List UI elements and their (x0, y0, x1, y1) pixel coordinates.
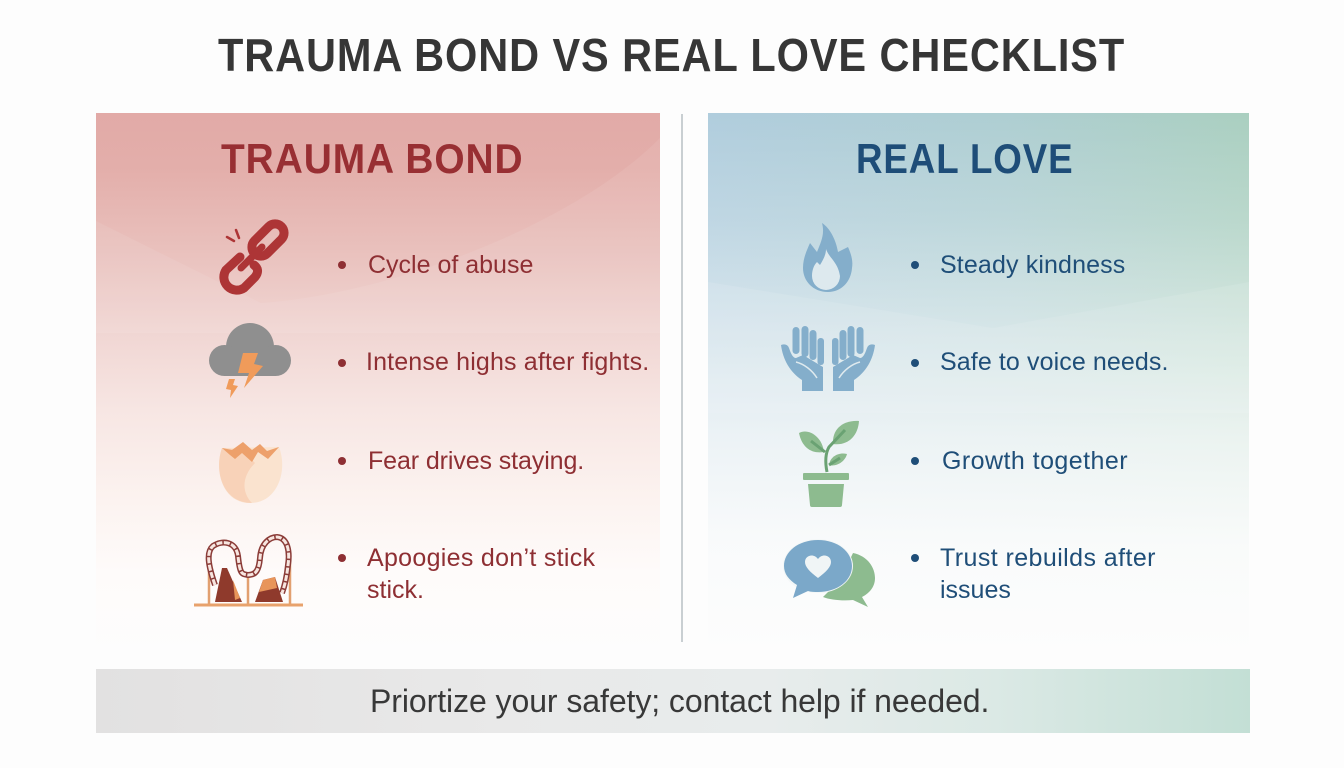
icon: broken chain (224, 220, 288, 290)
item: safe to voice needs: Safe to voice needs. (940, 348, 1169, 376)
center divider (681, 114, 683, 642)
panel: trauma bond (96, 113, 660, 653)
icon: flame (803, 223, 852, 292)
heading: trauma bond: TRAUMA BOND (221, 135, 524, 182)
footer text: Priortize your safety; contact help if needed. (370, 683, 989, 719)
icon: storm cloud (209, 323, 291, 398)
footer banner (96, 669, 1250, 733)
item: apologies (338, 544, 595, 604)
panel: real love (708, 113, 1249, 653)
item: apologies: Apoogies don’t stick (367, 544, 595, 572)
item: cycle of abuse: Cycle of abuse (368, 251, 533, 279)
item: fear drives staying: Fear drives staying. (368, 447, 584, 475)
item: intense highs: Intense highs after fights. (366, 348, 649, 376)
title: TRAUMA BOND VS REAL LOVE CHECKLIST (218, 29, 1125, 81)
icon: speech bubbles (783, 539, 875, 607)
heading: real love: REAL LOVE (856, 135, 1074, 182)
right hand (832, 326, 875, 391)
item: growth together: Growth together (942, 447, 1128, 475)
icon: open hands (781, 326, 875, 391)
item: trust rebuilds (911, 544, 1156, 604)
icon: roller coaster (194, 537, 303, 605)
item: trust rebuilds: issues (940, 576, 1011, 604)
item: steady kindness: Steady kindness (940, 251, 1125, 279)
left hand (781, 326, 824, 391)
item: trust rebuilds: Trust rebuilds after (940, 544, 1156, 572)
icon: cracked egg (219, 442, 282, 503)
item: apologies: stick. (367, 576, 424, 604)
icon: potted plant (799, 421, 859, 507)
